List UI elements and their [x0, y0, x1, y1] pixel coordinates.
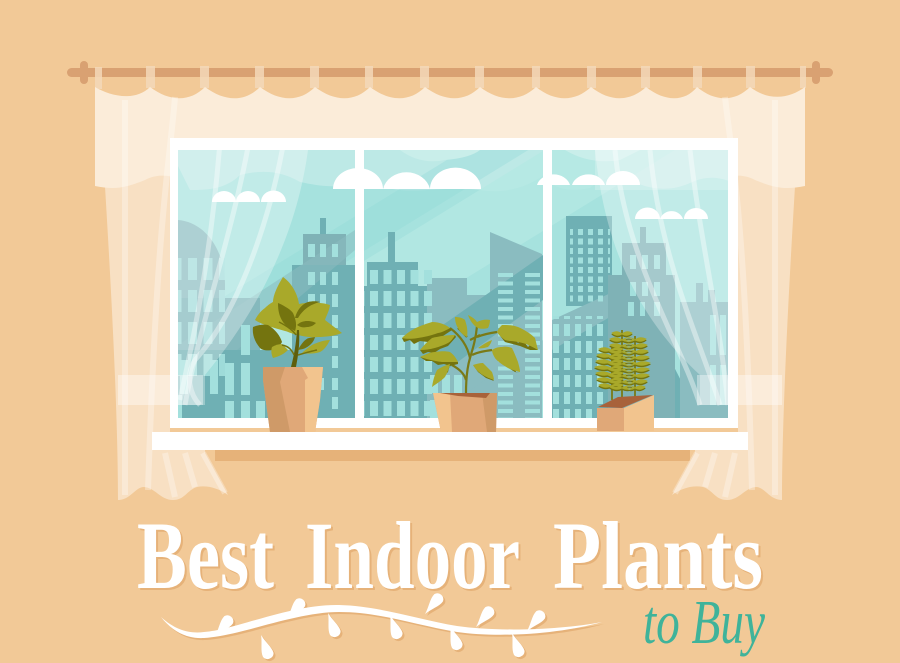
infographic illustration: [67, 61, 833, 661]
tie backs: [118, 375, 782, 405]
title: Indoor: [305, 502, 520, 609]
curtain rod: [67, 61, 833, 89]
window sill: [152, 428, 748, 450]
sheer curtain over glass: [178, 150, 728, 408]
window frame: [170, 138, 738, 428]
sky: [178, 150, 728, 418]
curtain: left drape: [104, 170, 228, 500]
plant 3: small tree in slanted planter: [595, 330, 654, 431]
buildings pane 1: [178, 218, 360, 418]
subtitle: to Buy: [643, 589, 765, 657]
window view: city: [118, 150, 782, 418]
title: [137, 502, 763, 609]
window mullions: [355, 150, 552, 418]
clouds: [212, 168, 708, 219]
buildings pane 3: [552, 216, 728, 418]
curtain: right drape: [672, 170, 796, 500]
decorative vine: [161, 591, 602, 661]
dark serrated undersides: [402, 328, 538, 387]
curtain: valance: [95, 87, 805, 188]
title: Best: [137, 502, 274, 609]
plant 2: serrated leaf in square pot: [402, 315, 538, 432]
sill shadow: [215, 450, 690, 461]
buildings pane 2: [364, 232, 543, 430]
plant 1: broad leaf in tall pot: [253, 277, 342, 432]
curtain pleats: [125, 97, 775, 497]
title: Plants: [553, 502, 763, 609]
